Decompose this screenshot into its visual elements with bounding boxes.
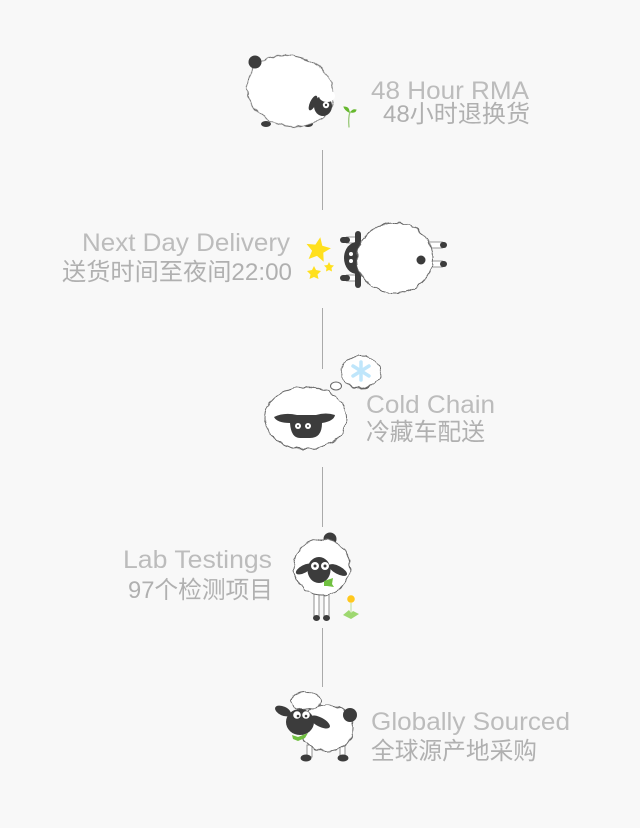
icon: sheep grazing, seen from the side bbox=[239, 46, 341, 136]
text: 48小时退换货: 48小时退换货 bbox=[383, 101, 530, 128]
text: Globally Sourced: Globally Sourced bbox=[371, 708, 570, 736]
item 2: Next Day Delivery bbox=[62, 223, 447, 293]
text: 48 Hour RMA: 48 Hour RMA bbox=[371, 77, 529, 105]
text: Next Day Delivery: Next Day Delivery bbox=[82, 229, 291, 257]
icon: green sprout bbox=[344, 107, 356, 127]
text: Cold Chain: Cold Chain bbox=[366, 391, 495, 419]
item 5: Globally Sourced bbox=[273, 692, 570, 765]
text: 全球源产地采购: 全球源产地采购 bbox=[371, 738, 537, 765]
icon: sheep on its back bbox=[340, 223, 447, 293]
icon: sheep eating grass, three-quarter view bbox=[273, 692, 357, 762]
item 1: 48 Hour RMA bbox=[239, 46, 530, 136]
icon: snowflake bbox=[353, 362, 369, 380]
icon: standing sheep front view bbox=[294, 532, 350, 621]
icon: sheep front view bbox=[265, 387, 347, 449]
item 3: Cold Chain bbox=[265, 356, 495, 449]
text: 冷藏车配送: 冷藏车配送 bbox=[366, 419, 485, 446]
connector line 1 bbox=[322, 150, 324, 210]
icon: grass in mouth bbox=[292, 733, 308, 741]
connector line 2 bbox=[322, 308, 324, 369]
text: Lab Testings: Lab Testings bbox=[123, 546, 272, 574]
icon: grass in mouth bbox=[324, 578, 334, 587]
item 4: Lab Testings bbox=[123, 532, 359, 621]
text: 送货时间至夜间22:00: 送货时间至夜间22:00 bbox=[62, 259, 292, 286]
connector line 3 bbox=[322, 467, 324, 527]
icon: yellow stars bbox=[306, 237, 334, 279]
connector line 4 bbox=[322, 628, 324, 687]
text: 97个检测项目: 97个检测项目 bbox=[128, 577, 273, 604]
icon: yellow flower bbox=[343, 595, 359, 619]
icon: thought bubble with snowflake bbox=[330, 356, 381, 390]
